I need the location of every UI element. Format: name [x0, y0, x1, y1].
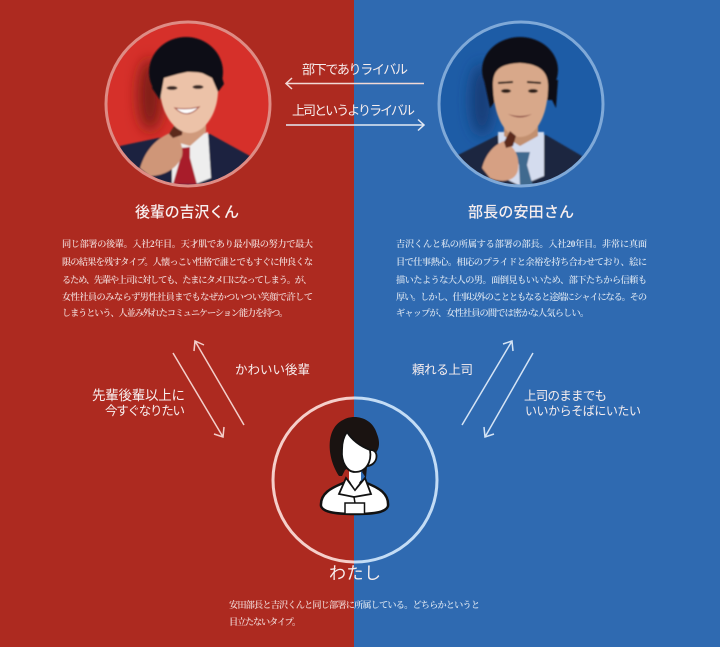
arrow: me to Yasuda	[462, 341, 513, 425]
arrow: me to Yoshizawa	[194, 341, 244, 425]
text block: Yoshizawa description: 女性社員のみならず男性社員までもなぜかついつい笑顔で許して	[62, 291, 313, 302]
background: red half	[0, 0, 354, 647]
label: 先輩後輩以上に今すぐなりたい: 先輩後輩以上に	[92, 388, 185, 403]
arrow: pointing left	[286, 78, 424, 89]
text block: me description	[229, 599, 480, 627]
label: 上司のままでもいいからそばにいたい: 上司のままでも	[524, 389, 607, 403]
arrow: Yoshizawa to me	[173, 353, 224, 437]
text block: Yoshizawa description: るため、先輩や上司に対しても、たまにタメ口になってしまう。が、	[62, 274, 312, 285]
text block: Yasuda description: 描いたような大人の男。面倒見もいいため、部下たちから信頼も	[396, 274, 647, 285]
arrow label: 上司というよりライバル: 上司というよりライバル	[292, 103, 415, 118]
text block: Yoshizawa description: しまうという、人並み外れたコミュニケーション能力を持つ。	[62, 307, 288, 318]
heading: 後輩の吉沢くん: 後輩の吉沢くん	[135, 204, 239, 221]
arrow: pointing right	[286, 120, 424, 130]
portrait: Yasuda	[439, 22, 603, 190]
text block: Yasuda description: 目で仕事熱心。相応のプライドと余裕を持ち合わせており、絵に	[396, 256, 647, 267]
text block: Yasuda description: 厚い。しかし、仕事以外のことともなると途端にシャイになる。その	[396, 291, 647, 302]
background: blue half	[354, 0, 720, 647]
icon: woman office worker	[321, 417, 388, 514]
portrait: Yoshizawa	[106, 22, 270, 190]
text block: Yasuda description	[396, 238, 647, 318]
text block: me description: 安田部長と吉沢くんと同じ部署に所属している。どちらかというと	[229, 599, 480, 610]
arrow label: 部下でありライバル: 部下でありライバル	[302, 62, 408, 77]
text block: Yasuda description: ギャップが、女性社員の間では密かな人気らしい。	[396, 307, 589, 318]
text block: Yoshizawa description: 限の結果を残すタイプ。人懐っこい性格で誰とでもすぐに仲良くな	[62, 256, 313, 267]
heading: わたし: わたし	[329, 564, 381, 583]
center circle ring	[273, 398, 437, 562]
label: 先輩後輩以上に今すぐなりたい	[92, 388, 185, 418]
label: 上司のままでもいいからそばにいたい: いいからそばにいたい	[525, 404, 641, 418]
text block: Yoshizawa description	[62, 238, 313, 318]
text block: me description: 目立たないタイプ。	[229, 616, 301, 627]
label: かわいい後輩: かわいい後輩	[235, 363, 310, 377]
heading: 部長の安田さん: 部長の安田さん	[468, 204, 574, 221]
label: 頼れる上司: 頼れる上司	[412, 363, 473, 377]
text block: Yasuda description: 吉沢くんと私の所属する部署の部長。入社20年目。非常に真面	[396, 238, 647, 249]
label: 上司のままでもいいからそばにいたい	[524, 389, 641, 418]
text block: Yoshizawa description: 同じ部署の後輩。入社2年目。天才肌であり最小限の努力で最大	[62, 238, 313, 249]
label: 先輩後輩以上に今すぐなりたい: 今すぐなりたい	[105, 403, 185, 418]
arrow: Yasuda to me	[484, 353, 533, 437]
